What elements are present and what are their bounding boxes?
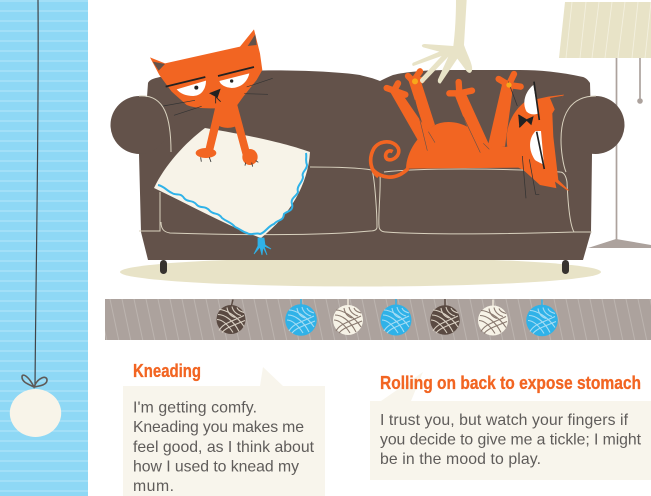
text: rolling description: I trust you, but watch your fingers if: [380, 412, 629, 429]
yarn ball: blue: [526, 300, 558, 336]
floor lamp: [559, 2, 651, 248]
yarn ball: blue: [285, 299, 317, 336]
blanket: [154, 128, 310, 255]
cat: rolling on back: [371, 71, 569, 198]
yarn ball: brown: [430, 299, 460, 335]
text: rolling description: you decide to give me a tickle; I might: [380, 432, 642, 448]
text: kneading description: Kneading you makes me: [133, 419, 304, 436]
text: kneading description: how I used to knead my: [133, 458, 299, 476]
yarn ball: brown: [216, 300, 246, 334]
floor shadow: [120, 258, 601, 286]
text: kneading description: feel good, as I think about: [133, 439, 315, 456]
panel: rolling on back: [370, 372, 651, 480]
yarn ball: blue: [380, 299, 412, 336]
left blue strip: [0, 0, 88, 496]
hand: [412, 0, 472, 83]
hanging string with yarn ball: [10, 0, 61, 437]
wool bar: [105, 299, 651, 340]
text: kneading description: mum.: [133, 478, 174, 495]
yarn ball: cream: [333, 299, 363, 335]
sofa: [110, 70, 624, 274]
heading: kneading: Kneading: [133, 361, 201, 381]
cat: kneading: [150, 29, 273, 167]
text: kneading description: I'm getting comfy.: [133, 400, 257, 416]
yarn ball: cream: [478, 300, 508, 336]
panel: kneading: [123, 361, 325, 496]
text: rolling description: be in the mood to play.: [380, 451, 541, 468]
